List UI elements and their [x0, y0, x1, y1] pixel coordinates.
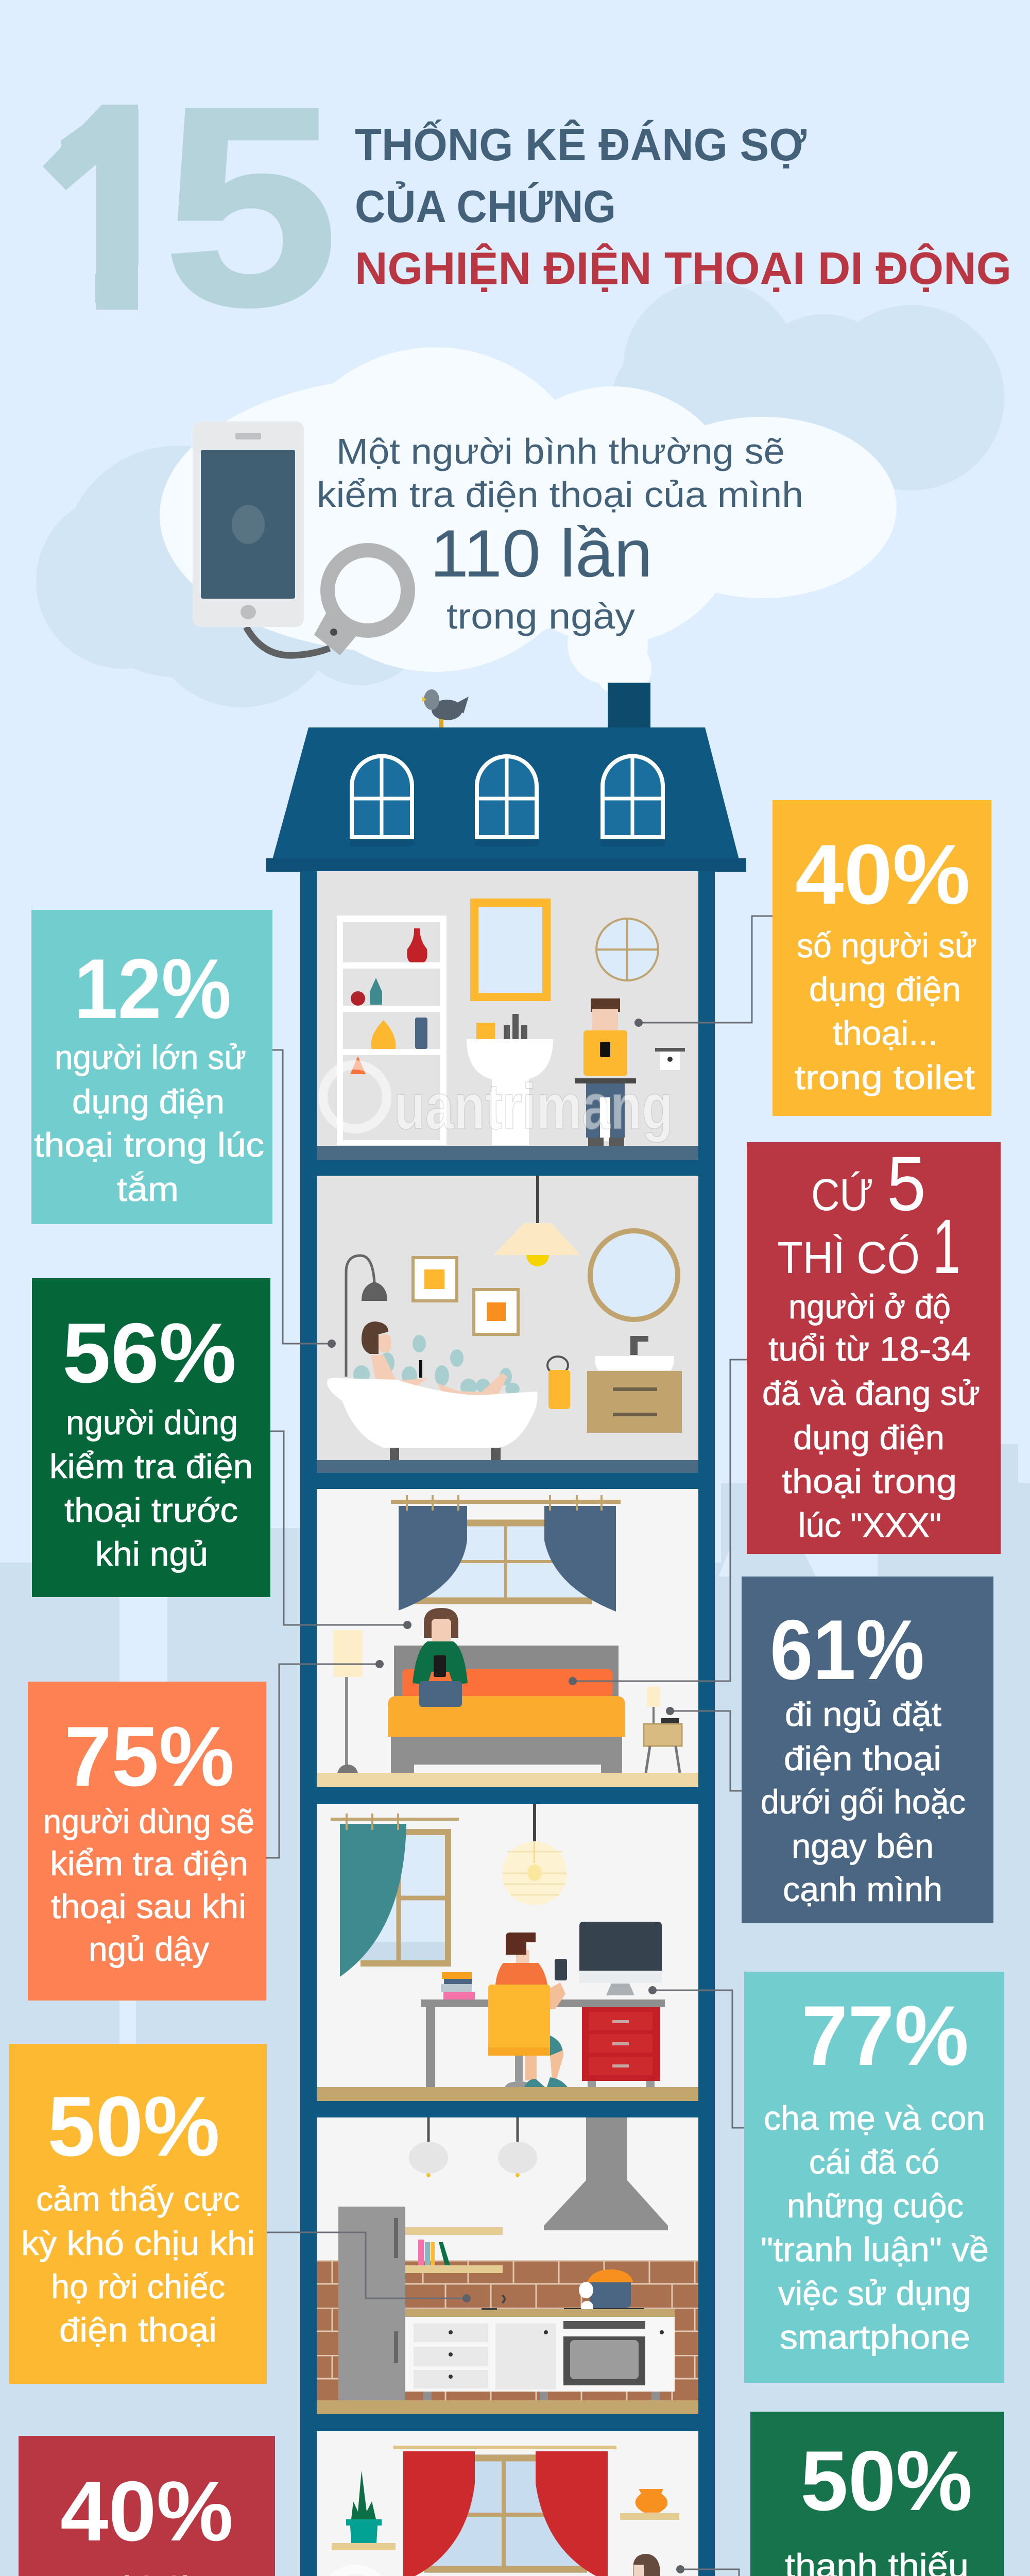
text: 61% description: ngay bên [792, 1827, 934, 1865]
text: 77% description: những cuộc [787, 2187, 964, 2225]
drawers [582, 2007, 660, 2087]
icon: bird [422, 689, 469, 727]
teal curtain [331, 1814, 459, 1977]
range hood [544, 2117, 668, 2230]
panel: 1 in 5 [747, 1140, 1001, 1554]
text: 1 in 5 description: thoại trong [782, 1462, 957, 1500]
back cloud right [610, 281, 1004, 490]
vanity [587, 1336, 682, 1433]
bed [388, 1646, 625, 1773]
clouds [36, 281, 1004, 707]
text: 12% description: tắm [117, 1170, 179, 1208]
panel: 40% toilet [772, 800, 991, 1116]
woman in tub [362, 1321, 507, 1397]
text: 77% description: việc sử dụng [778, 2274, 971, 2312]
red curtains [393, 2446, 616, 2576]
frames [413, 1258, 518, 1334]
window [412, 1520, 592, 1604]
big number 15: 5 [164, 49, 338, 364]
text: 61% description [761, 1695, 966, 1908]
icon: phone [193, 421, 330, 655]
watermark [323, 1065, 673, 1143]
text: 50% description: điện thoại [59, 2311, 217, 2349]
sink [467, 1014, 553, 1145]
text: 40% description: số người sử [797, 926, 977, 964]
title [355, 119, 1011, 294]
text: 40% description: thoại... [833, 1014, 938, 1052]
curtains [391, 1495, 621, 1612]
icon: handcuff [314, 550, 408, 655]
floor lamp [333, 1630, 363, 1773]
vase on shelf [620, 2489, 679, 2520]
title: THỐNG KÊ ĐÁNG SỢ [355, 119, 806, 170]
shelf [337, 916, 447, 1145]
back cloud left [36, 446, 427, 707]
title: NGHIỆN ĐIỆN THOẠI DI ĐỘNG [355, 243, 1011, 294]
panel: 61% under pillow: 61% [770, 1602, 924, 1697]
panel: 12% shower [31, 910, 272, 1224]
nightstand [644, 1687, 682, 1773]
woman on bed [413, 1608, 468, 1707]
text: 56% description: người dùng [66, 1403, 238, 1442]
mirror [474, 903, 546, 997]
heading: one in five: 5 [887, 1140, 926, 1227]
window [360, 1829, 451, 1966]
counter and cabinets [405, 2309, 675, 2400]
leader dots [328, 1019, 684, 2576]
text: 1 in 5 description: tuổi từ 18-34 [768, 1330, 971, 1368]
text: 12% description [34, 1038, 264, 1208]
text: 40% description: dụng điện [809, 970, 961, 1008]
intro statistic text: kiểm tra điện thoại của mình [317, 474, 803, 515]
roof [272, 727, 739, 859]
desk [421, 1999, 665, 2087]
text: 1 in 5 description: đã và đang sử [762, 1374, 980, 1412]
big number 15 [41, 48, 338, 364]
text: 56% description: khi ngủ [95, 1535, 208, 1573]
watermark: uantrimang [394, 1071, 673, 1143]
leader lines [217, 916, 870, 2576]
walls [300, 871, 715, 2576]
heading: one in five: THÌ CÓ [777, 1233, 920, 1283]
text: 61% description: điện thoại [784, 1739, 941, 1777]
panel: 56% before sleep: 56% [62, 1306, 236, 1400]
oval mirror [590, 1231, 678, 1319]
window [424, 2454, 587, 2573]
man on chair [488, 1933, 568, 2087]
panel: 50% uncomfortable: 50% [47, 2079, 220, 2174]
text: 1 in 5 description: lúc "XXX" [798, 1506, 941, 1544]
person on toilet [575, 998, 636, 1146]
pendant lamp [502, 1804, 567, 1905]
text: 75% description: người dùng sẽ [43, 1802, 254, 1840]
text: 12% description: thoại trong lúc [34, 1126, 264, 1164]
text: 61% description: đi ngủ đặt [785, 1695, 941, 1733]
chimney [608, 683, 650, 729]
text: 50% description [21, 2180, 255, 2349]
text: 61% description: cạnh mình [783, 1870, 942, 1908]
towel [547, 1357, 570, 1409]
text: 56% description: thoại trước [64, 1491, 238, 1529]
text: 50% description: họ rời chiếc [51, 2267, 225, 2306]
city skyline [0, 1444, 1030, 2576]
text: 40% description [795, 926, 977, 1096]
text: 56% description [49, 1403, 253, 1573]
panel: 50% teenagers: 50% [800, 2433, 972, 2528]
text: 1 in 5 description: người ở độ [788, 1287, 951, 1326]
round window [596, 919, 658, 980]
floor 4: study [317, 1804, 698, 2101]
fridge [338, 2207, 405, 2400]
pot on stove [564, 2269, 644, 2313]
text: 50% description: cảm thấy cực [36, 2180, 240, 2218]
toilet paper [655, 1048, 685, 1070]
house [266, 683, 746, 2576]
panel: 40% weekend [19, 2436, 275, 2576]
text: 40% description: trong toilet [795, 1058, 975, 1096]
floor 3: bedroom [317, 1489, 698, 1787]
heading: one in five: CỨ [811, 1170, 873, 1220]
plant on shelf [332, 2470, 396, 2550]
lamp [493, 1176, 580, 1266]
bubbles [353, 1335, 520, 1395]
watermark [323, 2569, 668, 2576]
roof windows [352, 756, 663, 837]
panel: 12% shower: 12% [74, 941, 231, 1036]
text: 75% description [43, 1802, 254, 1968]
floor 1: bathroom with toilet [317, 871, 698, 1160]
panel: 56% before sleep [32, 1278, 270, 1597]
intro statistic text: 110 lần [430, 516, 653, 591]
text: 75% description: kiểm tra điện [50, 1844, 248, 1883]
intro statistic text: Một người bình thường sẽ [336, 431, 785, 471]
oven [563, 2321, 645, 2385]
intro statistic text [317, 431, 803, 636]
heading: one in five: 1 [933, 1203, 960, 1290]
panel: 77% parents and kids: 77% [801, 1988, 969, 2083]
text: 1 in 5 description [762, 1287, 980, 1544]
floor 6: dining room [317, 2431, 698, 2576]
phone on counter [482, 2295, 505, 2309]
panel: 77% parents and kids [744, 1972, 1004, 2383]
big number 15: 1 [44, 48, 186, 363]
floor 2: bathtub [317, 1176, 698, 1473]
bathtub [327, 1378, 538, 1460]
text: 61% description: dưới gối hoặc [761, 1783, 966, 1821]
text: 56% description: kiểm tra điện [49, 1447, 253, 1485]
text: 50% description: kỳ khó chịu khi [21, 2224, 255, 2262]
title: CỦA CHỨNG [355, 181, 616, 232]
text: 75% description: thoại sau khi [51, 1887, 246, 1925]
panel: 50% uncomfortable [9, 2044, 267, 2384]
panel: 40% weekend: 40% [60, 2464, 233, 2558]
computer [579, 1922, 662, 1995]
panel: 40% toilet: 40% [795, 827, 970, 922]
panel: 50% teenagers [750, 2412, 1004, 2576]
panel: 75% after waking: 75% [64, 1709, 234, 1804]
text: 1 in 5 description: dụng điện [793, 1418, 945, 1456]
books [441, 1972, 475, 1999]
floor 5: kitchen [317, 2117, 698, 2414]
text: 77% description [761, 2099, 989, 2356]
panel: 61% under pillow [742, 1577, 993, 1923]
text: 77% description: "tranh luận" về [761, 2230, 989, 2268]
shelves with books [405, 2227, 503, 2273]
text: 12% description: người lớn sử [55, 1038, 246, 1076]
text: 77% description: smartphone [780, 2318, 970, 2356]
text: 77% description: cái đã có [809, 2143, 939, 2181]
text: 12% description: dụng điện [72, 1082, 225, 1121]
intro statistic text: trong ngày [447, 596, 635, 636]
text: 75% description: ngủ dậy [89, 1930, 209, 1968]
pendant lights [409, 2117, 537, 2177]
text: 77% description: cha mẹ và con [764, 2099, 985, 2137]
heading: one in five [777, 1140, 960, 1290]
shower [346, 1256, 387, 1377]
right chair and woman [595, 2554, 672, 2576]
front cloud [160, 347, 897, 697]
panel: 75% after waking [28, 1682, 266, 2001]
